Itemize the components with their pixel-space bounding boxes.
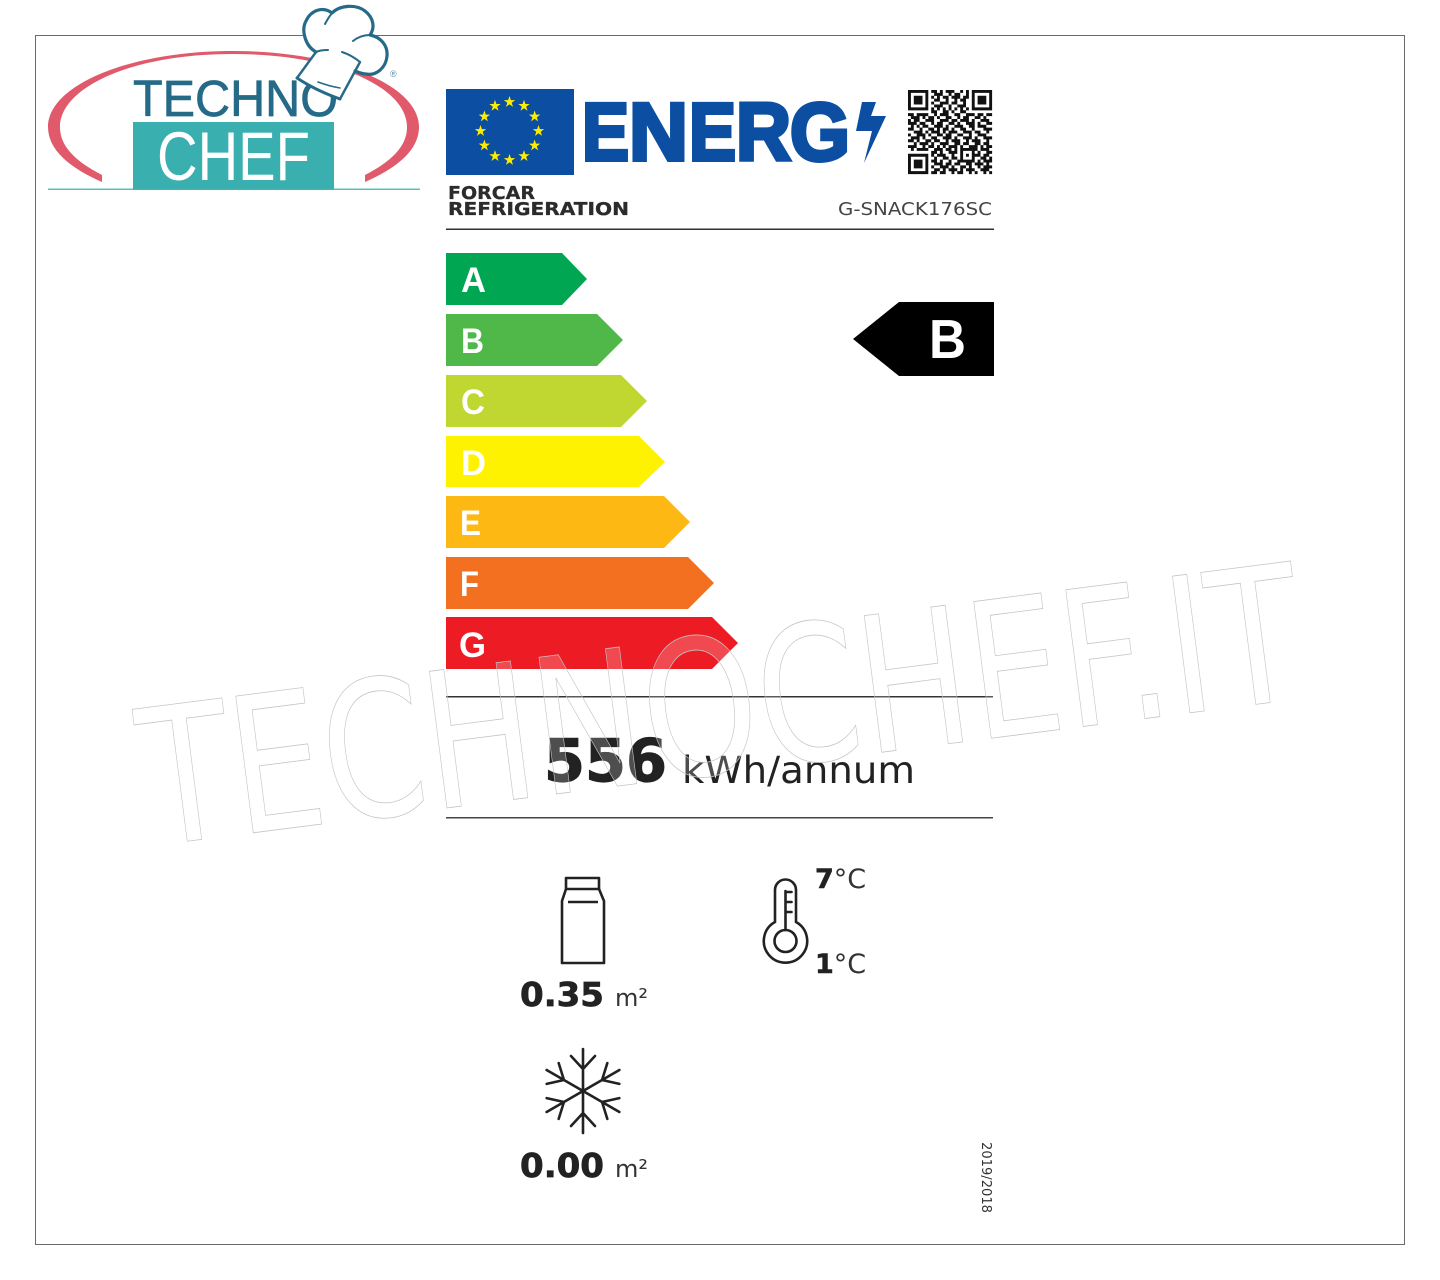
arrow E: E — [460, 504, 481, 543]
arrow F: F — [460, 565, 479, 604]
arrow B: B — [461, 322, 484, 361]
icon: lightning bolt — [856, 102, 886, 163]
logo word CHEF: CHEF — [157, 118, 310, 195]
logo registered mark: ® — [390, 69, 397, 79]
arrow C — [446, 375, 647, 427]
arrow A — [446, 253, 587, 305]
arrow A: A — [461, 261, 486, 300]
rating marker B — [853, 302, 994, 376]
model identifier: G-SNACK176SC — [838, 199, 992, 220]
temperature range — [815, 864, 866, 980]
chilled area value: m² — [615, 984, 648, 1012]
arrow G: G — [459, 626, 486, 665]
QR code — [908, 91, 992, 173]
arrow E — [446, 496, 690, 548]
regulation number: 2019/2018 — [978, 1142, 993, 1213]
icon: snowflake — [541, 1049, 625, 1133]
temperature range: 7°C — [815, 864, 866, 895]
ENERG heading — [582, 87, 850, 178]
ENERG heading: G — [790, 87, 850, 178]
arrow D — [446, 436, 665, 487]
EU flag — [446, 89, 574, 175]
energy scale arrows — [446, 253, 738, 669]
frozen area value: 0.00 — [520, 1146, 604, 1185]
logo baseline — [48, 188, 420, 190]
arrow G — [446, 617, 738, 669]
supplier name — [448, 183, 629, 220]
chilled area value: 0.35 — [520, 975, 604, 1014]
logo red ellipse swoosh — [48, 51, 419, 182]
supplier name: REFRIGERATION — [448, 199, 629, 220]
chilled area value — [520, 975, 648, 1014]
logo word TECHNO: TECHNO — [133, 70, 338, 127]
rating marker B: B — [929, 308, 966, 370]
logo teal box — [133, 122, 334, 190]
arrow C: C — [461, 383, 485, 422]
ENERG heading: E — [689, 87, 736, 178]
arrow B — [446, 314, 623, 366]
frozen area value: m² — [615, 1155, 648, 1183]
ENERG heading: N — [629, 87, 688, 178]
annual energy consumption: kWh/annum — [682, 748, 915, 792]
arrow F — [446, 557, 714, 609]
ENERG heading: E — [582, 87, 629, 178]
Techno Chef logo — [48, 6, 420, 195]
annual energy consumption: 556 — [544, 726, 667, 795]
ENERG heading: R — [736, 87, 791, 178]
temperature range: 1°C — [815, 949, 866, 980]
logo chef hat — [297, 6, 387, 99]
icon: thermometer — [764, 880, 807, 963]
annual energy consumption — [544, 726, 915, 795]
frozen area value — [520, 1146, 648, 1185]
icon: chilled display area — [562, 878, 604, 963]
supplier name: FORCAR — [448, 183, 535, 204]
arrow D: D — [461, 444, 486, 483]
